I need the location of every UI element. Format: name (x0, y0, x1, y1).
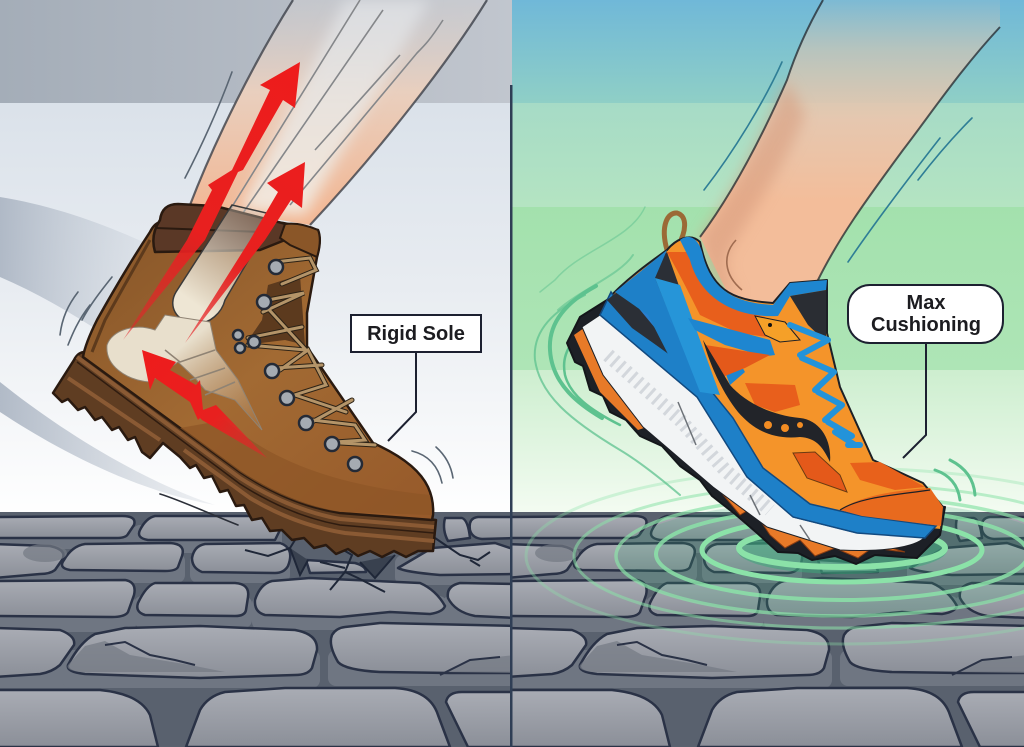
ripple rings (526, 468, 1024, 644)
orange lugs (715, 485, 905, 558)
divider line (510, 85, 512, 747)
toe cap (840, 488, 943, 526)
running shoe (567, 213, 945, 564)
callout: Rigid Sole: Rigid Sole (367, 323, 465, 345)
boot collar (153, 204, 290, 252)
collar orange panel (667, 252, 790, 340)
heel blue strap (615, 250, 718, 405)
callout: Max Cushioning: Max (907, 292, 945, 314)
eyelets (233, 260, 362, 471)
ground: cobblestones left (0, 512, 585, 747)
ground: cobblestones right (504, 512, 1024, 747)
blue side straps (688, 318, 775, 385)
boot sole (53, 352, 436, 557)
ground cracks under boot (245, 538, 490, 592)
callout: Max Cushioning: Cushioning (871, 314, 981, 336)
orange heel strip (574, 328, 650, 430)
collar blue trim (680, 237, 827, 316)
callout: Max Cushioning (848, 285, 1003, 458)
black swoosh (703, 340, 830, 462)
panel: right background (512, 0, 1024, 520)
white midsole (582, 315, 925, 550)
leg: left with bones (190, 0, 487, 225)
callout: Rigid Sole (351, 315, 481, 441)
leg: right (700, 0, 1000, 303)
red arrows (123, 62, 305, 343)
heel window (636, 283, 660, 334)
laces (790, 325, 860, 445)
eyestay (755, 316, 800, 342)
heel black panel (607, 252, 684, 357)
outsole (567, 300, 945, 564)
boot tongue (245, 275, 305, 345)
boot welt lines (68, 357, 434, 541)
mid mesh panels (745, 383, 800, 412)
panel: left background (0, 0, 512, 520)
boot upper (83, 222, 433, 520)
ripple lines behind shoe (535, 207, 975, 500)
heel loop (664, 213, 685, 250)
motion lines: right (704, 62, 972, 262)
ripple: green tint on ground (617, 500, 1024, 616)
laces (248, 258, 375, 445)
blue stripe (600, 292, 936, 538)
bones (107, 205, 275, 430)
red arrow: lower (142, 350, 267, 458)
shoe upper (607, 237, 943, 530)
boot (53, 62, 436, 557)
motion lines: left (60, 72, 453, 525)
